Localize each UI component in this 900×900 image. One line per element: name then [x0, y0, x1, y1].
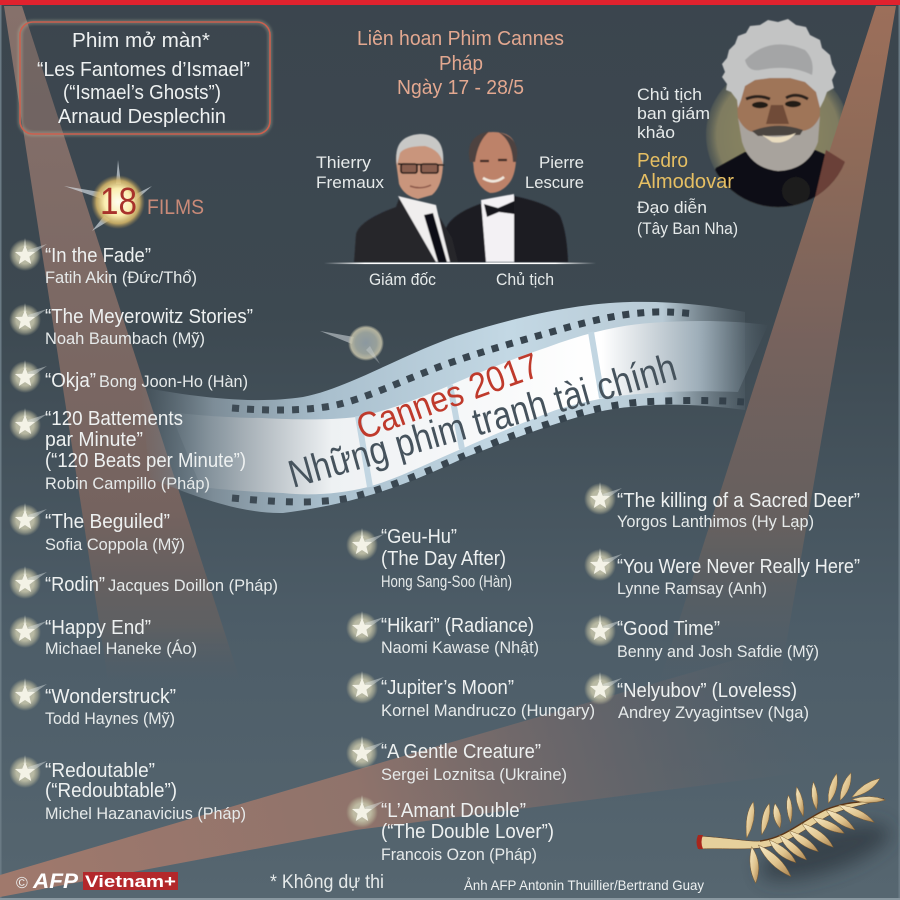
name: Pierre Lescure: Pierre: [539, 153, 584, 172]
film: Redoutable: “Redoutable”: [45, 759, 155, 782]
role: director: Giám đốc: [369, 270, 436, 289]
film: The killing of a Sacred Deer: [584, 482, 860, 531]
name: Pierre Lescure: Lescure: [525, 173, 584, 192]
film: A Gentle Creature: [346, 736, 567, 784]
film: Okja: Bong Joon-Ho (Hàn): [99, 372, 248, 391]
film: 120 Battements par Minute: [9, 407, 246, 493]
film: Good Time: Benny and Josh Safdie (Mỹ): [617, 642, 819, 661]
film: Geu-Hu: (The Day After): [381, 547, 506, 570]
film: Nelyubov: “Nelyubov” (Loveless): [617, 679, 797, 702]
film: Good Time: “Good Time”: [617, 617, 720, 640]
banner title: Cannes 2017: [351, 344, 544, 448]
film: 120 Battements par Minute: par Minute”: [45, 428, 143, 451]
film list: middle column: [346, 525, 595, 864]
film: Wonderstruck: “Wonderstruck”: [45, 685, 176, 708]
spotlight beam: bottom: [0, 612, 900, 897]
jury president text: Chủ tịch: [637, 85, 702, 104]
logo: AFP Vietnam+: ©: [16, 875, 28, 892]
decorative star on dark ground: [320, 325, 384, 364]
film: In the Fade: [9, 238, 197, 287]
film list: left column: [9, 238, 278, 823]
icon: palme d'or: [696, 773, 896, 892]
film: Rodin: “Rodin”: [45, 573, 105, 596]
film: Jupiter's Moon: “Jupiter’s Moon”: [381, 676, 514, 699]
sprocket holes: [232, 312, 696, 410]
festival heading: [357, 27, 564, 99]
panel: opening film: [20, 22, 270, 134]
film: Happy End: [9, 615, 197, 658]
film list: right column: [584, 482, 860, 722]
film frames: [170, 321, 768, 494]
festival heading: Pháp: [439, 52, 483, 75]
film: Geu-Hu: Hong Sang-Soo (Hàn): [381, 572, 512, 591]
18 films badge: [64, 160, 204, 231]
film: 120 Battements par Minute: (“120 Beats per Minute”): [45, 449, 246, 472]
banner subtitle: Những phim tranh tài chính: [284, 346, 681, 497]
film: The Beguiled: Sofia Coppola (Mỹ): [45, 535, 185, 554]
frame dividers: [358, 332, 602, 487]
name: Thierry Fremaux: Thierry: [316, 153, 372, 172]
film: Hikari: “Hikari” (Radiance): [381, 614, 534, 637]
film: You Were Never Really Here: [584, 548, 860, 598]
film: In the Fade: Fatih Akin (Đức/Thổ): [45, 268, 197, 287]
film: Jupiter's Moon: Kornel Mandruczo (Hungary): [381, 701, 595, 720]
18 films badge: FILMS: [147, 196, 204, 219]
jury president text: (Tây Ban Nha): [637, 219, 738, 238]
film: Happy End: “Happy End”: [45, 616, 151, 639]
festival heading: Liên hoan Phim Cannes: [357, 27, 564, 50]
name: Thierry Fremaux: Fremaux: [316, 173, 384, 192]
film: The Meyerowitz Stories: “The Meyerowitz Stories”: [45, 305, 253, 328]
film: Okja: “Okja”: [45, 369, 96, 392]
film: Redoutable: (“Redoubtable”): [45, 779, 177, 802]
jury president text: Pedro: [637, 149, 688, 172]
film: A Gentle Creature: “A Gentle Creature”: [381, 740, 541, 763]
film: L'Amant Double: [346, 795, 554, 864]
jury president text: khảo: [637, 123, 675, 142]
film: Good Time: [584, 614, 819, 661]
name: Pierre Lescure: [525, 153, 584, 192]
18 films badge: 18: [100, 181, 137, 223]
film: Hikari: Naomi Kawase (Nhật): [381, 638, 539, 657]
photo baseline: [324, 262, 596, 264]
film: Redoutable: Michel Hazanavicius (Pháp): [45, 804, 246, 823]
film: You Were Never Really Here: “You Were Never Really Here”: [617, 555, 860, 578]
film: The Meyerowitz Stories: [9, 303, 253, 348]
footnote: out of competition: * Không dự thi: [270, 872, 384, 893]
film: Geu-Hu: “Geu-Hu”: [381, 525, 457, 548]
film: The killing of a Sacred Deer: “The killing of a Sacred Deer”: [617, 489, 860, 512]
photo credit: Ảnh AFP Antonin Thuillier/Bertrand Guay: [464, 877, 704, 893]
film: Hikari: [346, 611, 539, 657]
film: L'Amant Double: “L’Amant Double”: [381, 799, 526, 822]
logo: AFP Vietnam+: Vietnam+: [85, 872, 176, 891]
film: Nelyubov: [584, 672, 809, 722]
film: Nelyubov: Andrey Zvyagintsev (Nga): [618, 703, 809, 722]
top red bar: [0, 0, 900, 5]
film: The killing of a Sacred Deer: Yorgos Lanthimos (Hy Lạp): [617, 512, 814, 531]
film: Okja: [9, 360, 248, 393]
film: L'Amant Double: Francois Ozon (Pháp): [381, 845, 537, 864]
film: Happy End: Michael Haneke (Áo): [45, 639, 197, 658]
film: The Beguiled: “The Beguiled”: [45, 510, 170, 533]
jury president text: Almodovar: [638, 170, 734, 193]
film: Geu-Hu: [346, 525, 512, 591]
film: The Meyerowitz Stories: Noah Baumbach (Mỹ): [45, 329, 205, 348]
film strip banner: [140, 302, 768, 513]
spotlight beam: right: [660, 6, 896, 680]
film: The Beguiled: [9, 503, 185, 554]
film: Jupiter's Moon: [346, 671, 595, 720]
film: A Gentle Creature: Sergei Loznitsa (Ukraine): [381, 765, 567, 784]
photo: Pedro Almodovar: [714, 18, 845, 208]
film: Wonderstruck: Todd Haynes (Mỹ): [45, 709, 175, 728]
photo: Thierry Fremaux and Pierre Lescure: [354, 131, 568, 262]
role: president: Chủ tịch: [496, 270, 554, 289]
film: 120 Battements par Minute: Robin Campillo (Pháp): [45, 474, 210, 493]
panel: opening film: “Les Fantomes d’Ismael”: [37, 58, 250, 81]
film: Rodin: [9, 566, 278, 599]
panel: opening film: Phim mở màn*: [72, 29, 210, 52]
film: 120 Battements par Minute: “120 Battements: [45, 407, 183, 430]
logo: AFP Vietnam+: [16, 870, 178, 893]
festival heading: Ngày 17 - 28/5: [397, 76, 524, 99]
halo behind Pedro Almodovar: [706, 63, 850, 207]
jury president text: [637, 85, 738, 238]
name: Thierry Fremaux: [316, 153, 384, 192]
jury president text: Đạo diễn: [637, 198, 707, 217]
film: You Were Never Really Here: Lynne Ramsay (Anh): [617, 579, 767, 598]
spotlight beam: left: [4, 6, 240, 680]
film: Wonderstruck: [9, 678, 176, 728]
jury president text: ban giám: [637, 104, 710, 123]
panel: opening film: (“Ismael’s Ghosts”): [63, 81, 221, 104]
film: Redoutable: [9, 755, 246, 823]
film: Rodin: Jacques Doillon (Pháp): [108, 576, 278, 595]
film: L'Amant Double: (“The Double Lover”): [381, 820, 554, 843]
film: In the Fade: “In the Fade”: [45, 244, 151, 267]
logo: AFP Vietnam+: AFP: [32, 870, 79, 893]
panel: opening film: Arnaud Desplechin: [58, 105, 226, 128]
